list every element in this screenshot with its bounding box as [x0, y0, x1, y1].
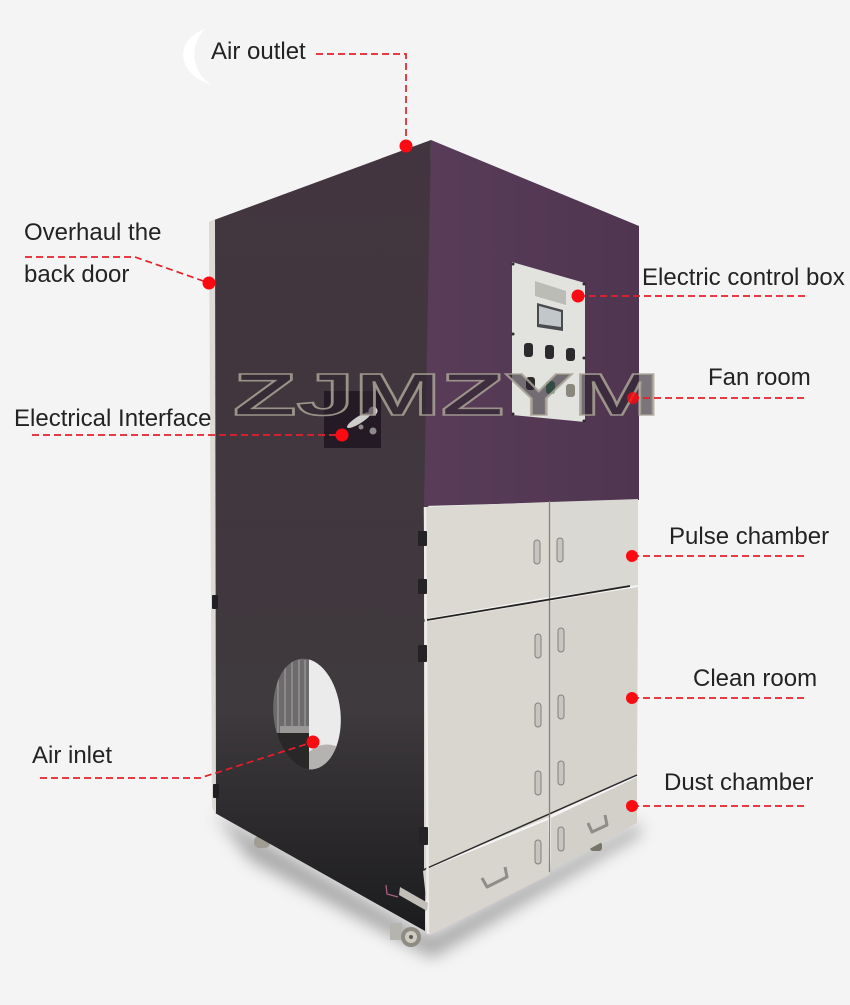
- crescent highlight near the air outlet: [183, 29, 212, 85]
- label: overhaul the back door: [24, 219, 216, 290]
- label: electrical interface: Electrical Interface: [14, 405, 211, 432]
- air inlet opening: [273, 658, 341, 770]
- label: pulse chamber: [626, 523, 829, 562]
- black hinges: [418, 531, 428, 845]
- left edge latches: [212, 595, 219, 798]
- label: electric control box: [572, 264, 845, 302]
- label: fan room: Fan room: [708, 364, 811, 391]
- left side panel: [214, 140, 431, 931]
- label: clean room: Clean room: [693, 665, 817, 692]
- machine cabinet: [209, 140, 639, 947]
- label: overhaul the back door: Overhaul the: [24, 219, 161, 246]
- door latches: [534, 538, 564, 864]
- label: electrical interface: [14, 405, 348, 442]
- right upper panel: fan room: [424, 140, 639, 506]
- label: electric control box: Electric control box: [642, 264, 845, 291]
- label: dust chamber: Dust chamber: [664, 769, 813, 796]
- watermark: ZJMZYM: [233, 362, 660, 428]
- electric control panel: [512, 262, 586, 422]
- label: pulse chamber: Pulse chamber: [669, 523, 829, 550]
- label: air outlet: Air outlet: [211, 38, 306, 65]
- pulse chamber doors: [424, 499, 638, 619]
- front caster: [390, 923, 421, 947]
- nameplate bracket: [386, 885, 428, 911]
- label: overhaul the back door: back door: [24, 261, 129, 288]
- floor shadow: [214, 812, 640, 958]
- label: clean room: [626, 665, 817, 704]
- clean room doors: [424, 587, 638, 869]
- left edge strip: [209, 219, 216, 814]
- dust chamber drawers: [423, 501, 637, 935]
- label: air inlet: [32, 736, 320, 778]
- electrical interface plate: [324, 391, 381, 448]
- rear casters: [254, 836, 602, 851]
- label: air outlet: [211, 38, 412, 152]
- label: air inlet: Air inlet: [32, 742, 112, 769]
- label: fan room: [627, 364, 811, 404]
- label: dust chamber: [626, 769, 813, 812]
- drawer handles: [482, 815, 607, 887]
